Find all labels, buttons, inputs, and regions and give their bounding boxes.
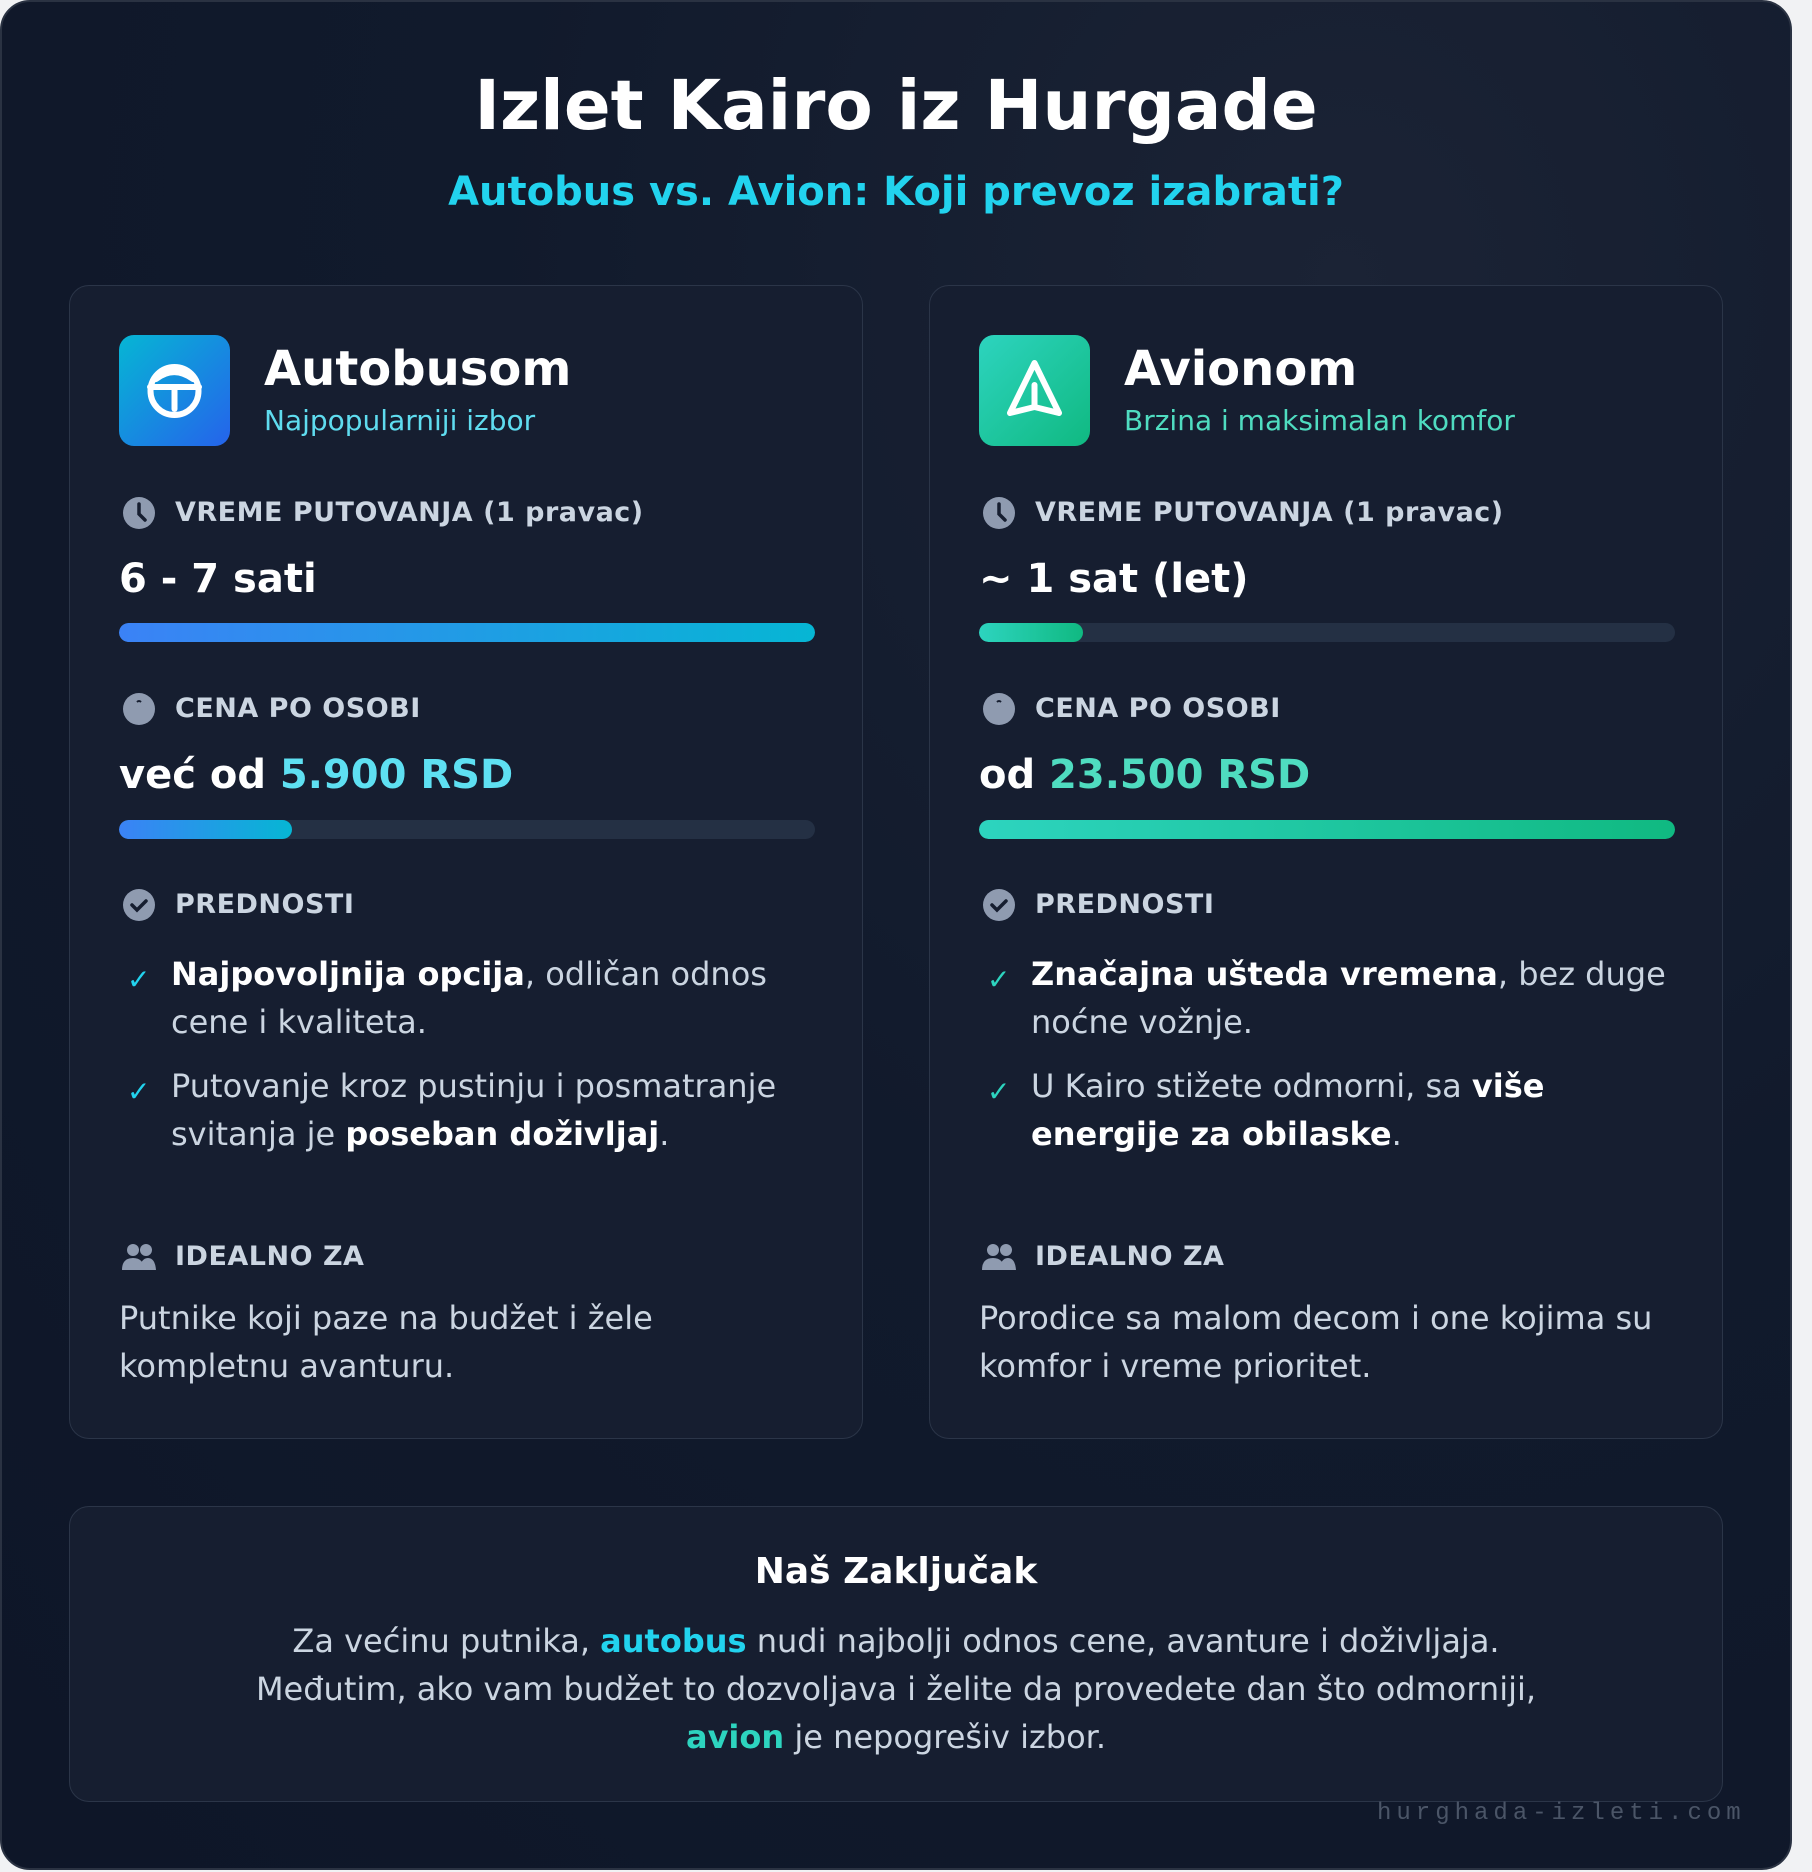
bullet 1 (127, 955, 767, 1041)
panel: plane: U Kairo stižete odmorni, sa više energije za obilaske. (1031, 1067, 1544, 1153)
conclusion text: avion je nepogrešiv izbor. (686, 1718, 1106, 1756)
value: price: već od 5.900 RSD (119, 752, 513, 798)
label: advantages: PREDNOSTI (175, 889, 354, 920)
bullet 1 (987, 955, 1666, 1041)
bus title: Autobusom (264, 341, 571, 397)
icon: people (122, 1244, 156, 1270)
value: price: od 23.500 RSD (979, 752, 1310, 798)
bar: price (979, 820, 1675, 839)
watermark: hurghada-izleti.com (1377, 1800, 1746, 1827)
value: time: ~ 1 sat (let) (979, 556, 1249, 602)
icon: clock (983, 497, 1015, 529)
icon: coin (983, 693, 1015, 725)
panel: bus (69, 285, 863, 1439)
panel: plane: Značajna ušteda vremena, bez duge noćne vožnje. (1031, 955, 1666, 1041)
value: time: 6 - 7 sati (119, 556, 317, 602)
label: travel time: VREME PUTOVANJA (1 pravac) (1035, 497, 1504, 528)
conclusion text: Međutim, ako vam budžet to dozvoljava i želite da provedete dan što odmorniji, (256, 1670, 1536, 1708)
icon: coin (123, 693, 155, 725)
ideal text: Porodice sa malom decom i one kojima su komfor i vreme prioritet. (979, 1299, 1652, 1385)
label: advantages: PREDNOSTI (1035, 889, 1214, 920)
conclusion text (256, 1622, 1536, 1756)
panel: plane: ✓ (987, 1075, 1010, 1108)
label: ideal for: IDEALNO ZA (1035, 1241, 1224, 1272)
panel: plane: ✓ (987, 963, 1010, 996)
bar: time (119, 623, 815, 642)
label: price: CENA PO OSOBI (175, 693, 421, 724)
icon: check circle (123, 889, 155, 921)
conclusion text: Za većinu putnika, autobus nudi najbolji odnos cene, avanture i doživljaja. (292, 1622, 1500, 1660)
icon: clock (123, 497, 155, 529)
icon: people (982, 1244, 1016, 1270)
icon: bus (119, 335, 230, 446)
conclusion heading: Naš Zaključak (755, 1551, 1037, 1592)
panel: bus: Najpovoljnija opcija, odličan odnos cene i kvaliteta. (171, 955, 767, 1041)
plane subtitle: Brzina i maksimalan komfor (1124, 404, 1515, 437)
panel: bus: Putovanje kroz pustinju i posmatranje svitanja je poseban doživljaj. (171, 1067, 776, 1153)
icon: check circle (983, 889, 1015, 921)
panel: plane (929, 285, 1723, 1439)
bar: time (979, 623, 1675, 642)
panel: bus: ✓ (127, 1075, 150, 1108)
bullet 2 (987, 1067, 1544, 1153)
label: travel time: VREME PUTOVANJA (1 pravac) (175, 497, 644, 528)
bar: price (119, 820, 815, 839)
label: ideal for: IDEALNO ZA (175, 1241, 364, 1272)
title: Izlet Kairo iz Hurgade (474, 66, 1318, 146)
subtitle: Autobus vs. Avion: Koji prevoz izabrati? (448, 169, 1344, 215)
label: price: CENA PO OSOBI (1035, 693, 1281, 724)
bus subtitle: Najpopularniji izbor (264, 404, 535, 437)
panel: conclusion (69, 1506, 1723, 1802)
plane title: Avionom (1124, 341, 1357, 397)
bullet 2 (127, 1067, 776, 1153)
panel: bus: ✓ (127, 963, 150, 996)
icon: plane (979, 335, 1090, 446)
ideal text: Putnike koji paze na budžet i žele kompletnu avanturu. (119, 1299, 653, 1385)
